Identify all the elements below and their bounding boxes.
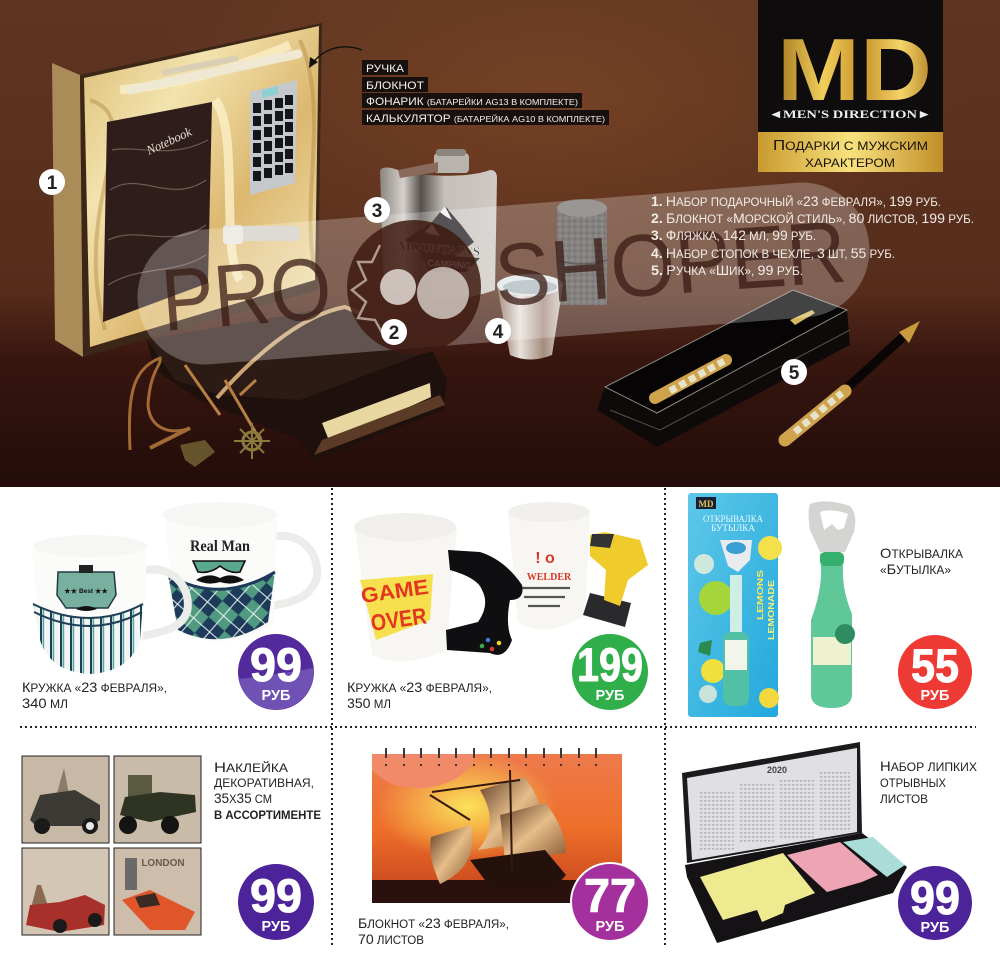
label: flashlight: ФОНАРИК (БАТАРЕЙКИ AG13 В КОМПЛЕКТЕ) (366, 96, 578, 108)
caption: В АССОРТИМЕНТЕ (214, 810, 321, 822)
kit contents labels (362, 60, 609, 125)
tagline strip (758, 132, 943, 172)
price badge 77 (570, 862, 650, 942)
caption: КРУЖКА «23 ФЕВРАЛЯ», (22, 679, 167, 695)
pink notes (787, 842, 878, 892)
blister card: ОТКРЫВАЛКА (703, 514, 763, 524)
gift box set (52, 23, 322, 357)
sticker: orange car and London: LONDON (141, 858, 185, 869)
caption: 350 МЛ (347, 695, 391, 711)
MD logo block (758, 0, 943, 172)
caption (880, 545, 963, 577)
label: notepad (362, 77, 428, 92)
opener bottle (808, 501, 855, 708)
dotted grid dividers (20, 488, 976, 948)
sticker: black vintage car (22, 756, 109, 843)
badge 4 (485, 318, 511, 344)
best man emblem (57, 565, 116, 611)
price badge 55 (898, 635, 972, 709)
flask (380, 149, 497, 300)
caption (214, 759, 321, 822)
label: pen (362, 60, 408, 75)
caption: ОТРЫВНЫХ (880, 778, 946, 790)
price badge 99: 99 (250, 638, 302, 691)
leather notepad in box: Notebook (143, 124, 194, 158)
leather strap (217, 307, 360, 398)
badge 1: 1 (47, 173, 58, 194)
panel: striped and argyle mugs (22, 502, 317, 711)
leather notebook with laces (129, 305, 447, 467)
blister card: MD (698, 499, 714, 509)
label: calculator: КАЛЬКУЛЯТОР (БАТАРЕЙКА AG10 В КОМПЛЕКТЕ) (366, 113, 605, 125)
price badge 77: РУБ (596, 919, 624, 935)
blister card: LEMONS (756, 569, 765, 620)
ship-wheel charm (234, 423, 270, 459)
leather shot-glass case (557, 199, 607, 305)
flask emblem: CAMPING (427, 258, 471, 272)
mug: Game Over: OVER (369, 602, 428, 636)
leather notepad in box (103, 102, 212, 322)
price badge 99: РУБ (921, 920, 949, 936)
badge 5 (781, 359, 807, 385)
notepad cover (372, 754, 622, 903)
price badge 99: 99 (250, 869, 302, 922)
best man emblem: ★★ Best ★★ (64, 588, 108, 595)
price badge 199: РУБ (596, 688, 624, 704)
badge 5: 5 (789, 363, 800, 384)
caption (358, 915, 509, 947)
price badge 99 (238, 864, 314, 940)
price badge 99: РУБ (262, 919, 290, 935)
numbered price list: 4. НАБОР СТОПОК В ЧЕХЛЕ, 3 ШТ, 55 РУБ. (651, 245, 895, 261)
caption: 35Х35 СМ (214, 790, 272, 806)
mug: Real Man: Real Man (190, 538, 250, 555)
box lid frame (80, 23, 322, 357)
spiral binding (386, 748, 596, 766)
flashlight (223, 225, 300, 244)
caption: НАБОР ЛИПКИХ (880, 758, 977, 774)
caption (22, 679, 167, 711)
panel: decorative stickers (22, 756, 321, 940)
label: pen: РУЧКА (366, 63, 405, 75)
pen in box (655, 360, 726, 398)
loose pen (785, 321, 920, 440)
price badge 199 (572, 634, 648, 710)
blister card: LEMONADE (767, 579, 776, 640)
panel: sailing ship notepad (358, 748, 650, 947)
notebook pages (322, 383, 431, 443)
caption: ДЕКОРАТИВНАЯ, (214, 778, 314, 790)
price badge 99 (238, 634, 314, 710)
mug: The Best Man (32, 535, 188, 674)
caption: 340 МЛ (22, 695, 68, 711)
MD letters: MD (777, 20, 932, 119)
blister card (688, 493, 782, 717)
mustache and glasses (193, 561, 245, 584)
game controller handle (446, 550, 522, 655)
badge 2: 2 (389, 323, 399, 344)
sticker: red car and tower (22, 848, 109, 935)
panel: sticky notes set (682, 742, 977, 943)
caption (347, 679, 492, 711)
pen gift box (597, 290, 850, 447)
price badge 199: 199 (577, 638, 643, 691)
mug: Caution Welder: WELDER (527, 572, 572, 583)
mug: Game Over: GAME (359, 576, 430, 608)
mug: Caution Welder: ! o (535, 550, 555, 567)
flask emblem (398, 206, 481, 272)
ship (430, 770, 566, 887)
caption: БЛОКНОТ «23 ФЕВРАЛЯ», (358, 915, 509, 931)
price badge 55: 55 (911, 639, 959, 692)
price badge 77: 77 (584, 869, 636, 922)
calculator (250, 80, 297, 195)
numbered price list: 1. НАБОР ПОДАРОЧНЫЙ «23 ФЕВРАЛЯ», 199 РУБ. (651, 193, 941, 209)
numbered price list: 2. БЛОКНОТ «МОРСКОЙ СТИЛЬ», 80 ЛИСТОВ, 199 РУБ. (651, 210, 974, 226)
sticker: orange car and London (114, 848, 201, 935)
tray (685, 833, 907, 943)
caption (880, 758, 977, 806)
panel: dark brown gift banner (0, 0, 1000, 487)
tagline strip: ХАРАКТЕРОМ (805, 156, 895, 170)
blister card: БУТЫЛКА (711, 523, 755, 533)
brand line: ◄MEN'S DIRECTION► (768, 107, 932, 121)
numbered price list: 5. РУЧКА «ШИК», 99 РУБ. (651, 262, 803, 278)
anchor charm (180, 440, 215, 467)
watermark: PRO SHOPER: SHOPER (491, 202, 849, 325)
badge 3: 3 (372, 201, 382, 222)
price badge 99: РУБ (262, 688, 290, 704)
caption: НАКЛЕЙКА (214, 759, 288, 775)
mug: Caution Welder (508, 502, 590, 630)
caption: ОТКРЫВАЛКА (880, 545, 963, 561)
box side panel (52, 63, 83, 357)
drill handle (583, 532, 648, 627)
blue notes (843, 837, 905, 877)
caption: КРУЖКА «23 ФЕВРАЛЯ», (347, 679, 492, 695)
flask emblem: MOUNTAINS (398, 239, 481, 259)
label: notepad: БЛОКНОТ (366, 80, 424, 92)
numbered price list (651, 193, 974, 278)
panel: bottle opener (688, 493, 972, 717)
badge 3 (364, 197, 390, 223)
price badge 99 (898, 866, 972, 940)
badge 2 (381, 319, 407, 345)
caption: «БУТЫЛКА» (880, 561, 951, 577)
panel: novelty mugs (347, 502, 648, 711)
arrow to pen (309, 47, 362, 68)
satin lining (84, 26, 319, 347)
tagline strip: ПОДАРКИ С МУЖСКИМ (773, 137, 928, 154)
sticker: dark green vintage car (114, 756, 201, 843)
badge 1 (39, 169, 65, 195)
item number badges (39, 169, 807, 385)
mug: Game Over (354, 513, 457, 661)
mug: Real Man (163, 502, 317, 641)
watermark: PRO SHOPER (158, 202, 849, 354)
calendar lid (682, 742, 862, 863)
yellow notes (700, 853, 815, 922)
numbered price list: 3. ФЛЯЖКА, 142 МЛ, 99 РУБ. (651, 227, 816, 243)
price badge 55: РУБ (921, 688, 949, 704)
badge 4: 4 (493, 322, 504, 343)
caption: 70 ЛИСТОВ (358, 931, 424, 947)
caption: ЛИСТОВ (880, 794, 928, 806)
price badge 99: 99 (910, 871, 960, 924)
watermark: PRO SHOPER: PRO (158, 238, 335, 350)
metal shot glass (497, 274, 563, 360)
calendar lid: 2020 (767, 765, 787, 775)
satin pen (130, 54, 298, 90)
